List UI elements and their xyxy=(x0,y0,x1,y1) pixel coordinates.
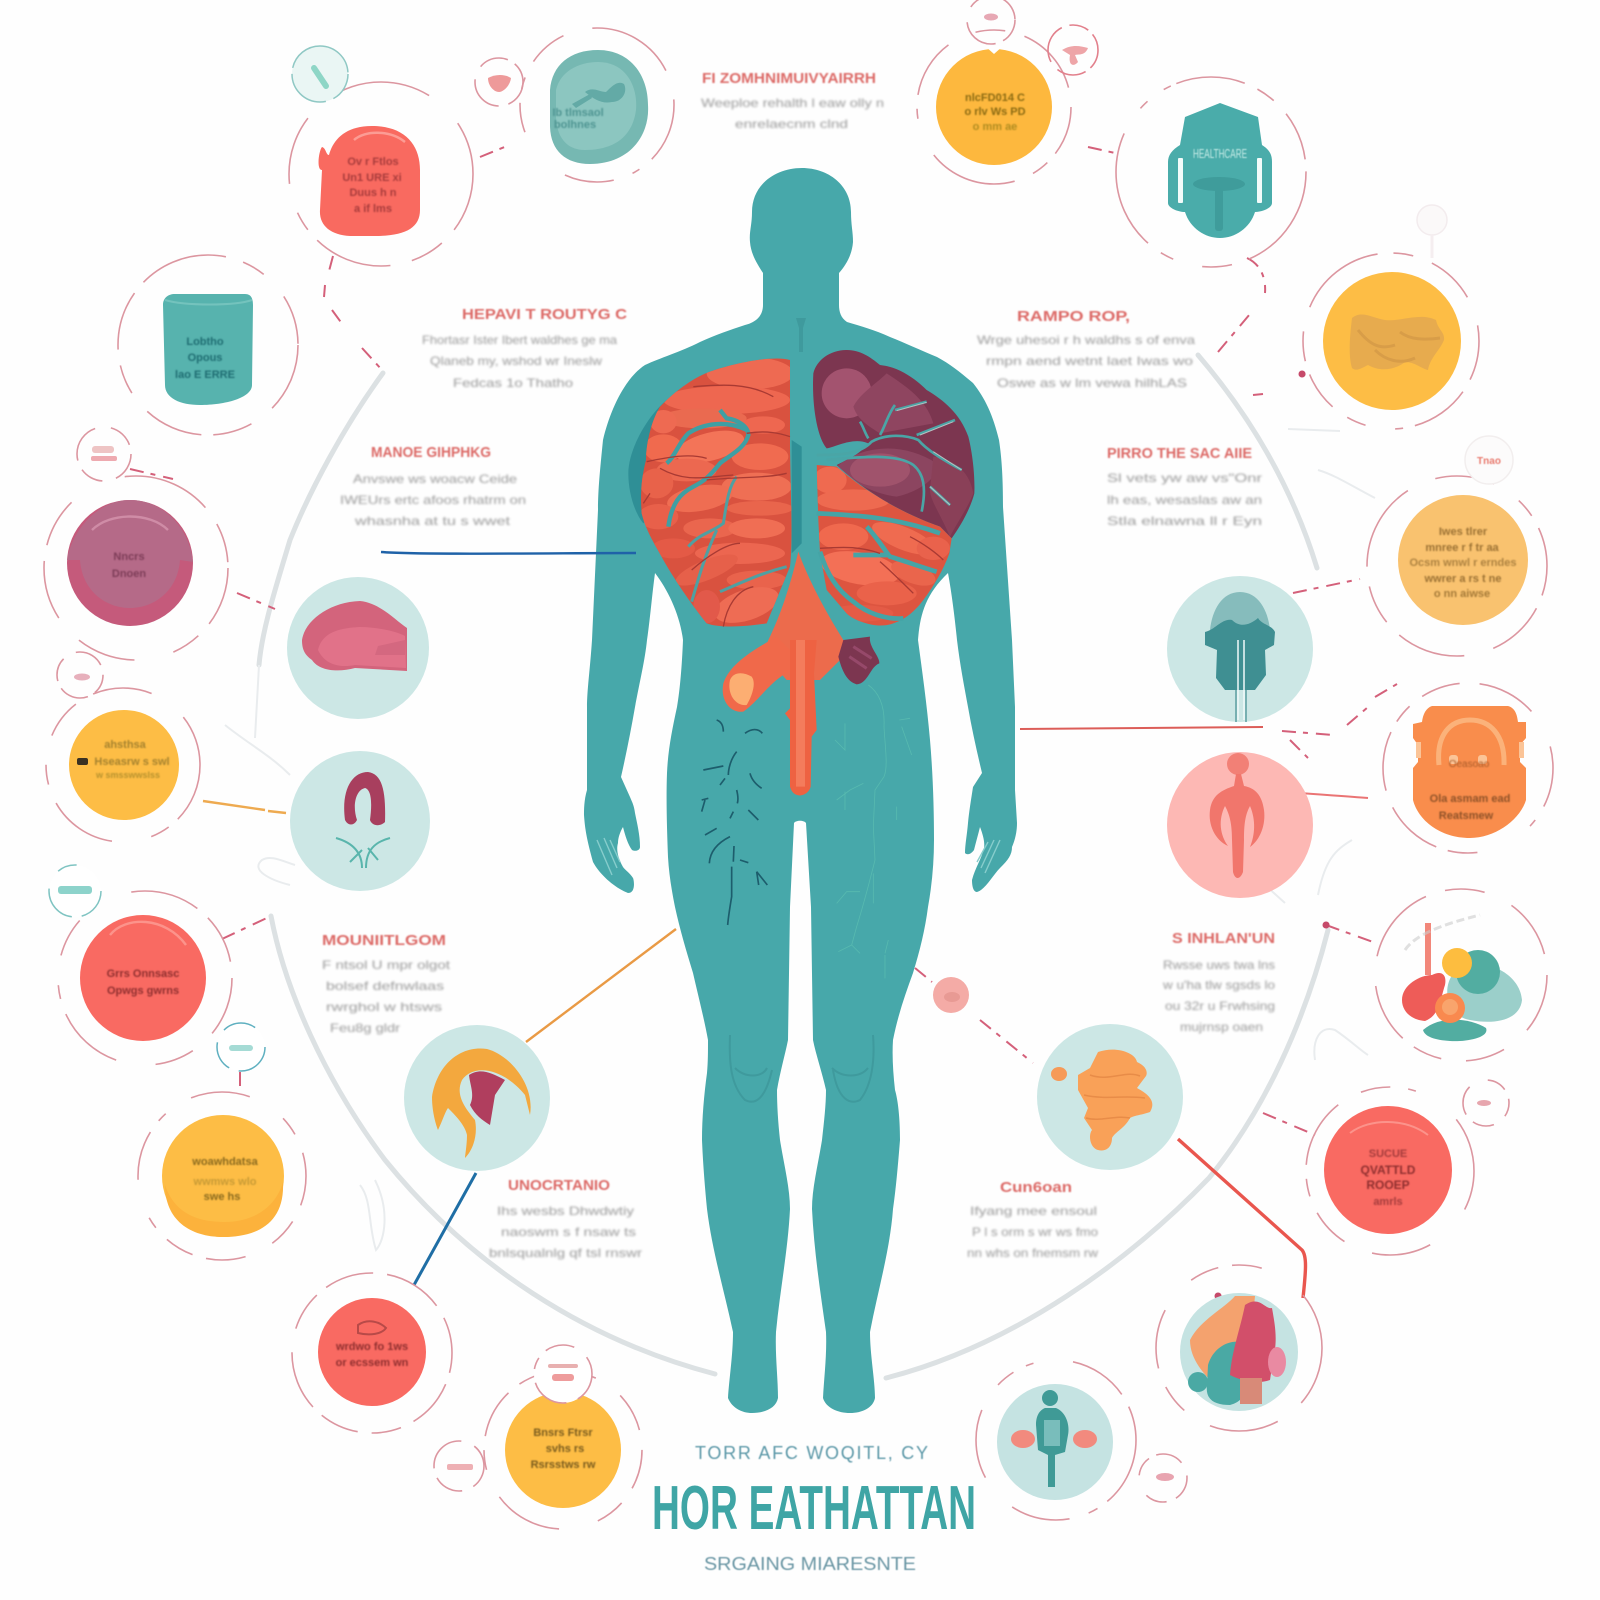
small ring: bottom left xyxy=(434,1441,484,1491)
panel: teal square item: Lobtho xyxy=(186,336,224,348)
organs: lungs and airway, drawn in 3x local coordinates xyxy=(628,347,980,680)
connector: orange to teal circle xyxy=(526,929,676,1042)
dark lobe vessels xyxy=(817,402,962,512)
panel: light orange item: mnree r f tr aa xyxy=(1425,542,1500,554)
central tube xyxy=(785,640,817,795)
panel: teal square item xyxy=(118,255,298,435)
panel: yellow bottom item xyxy=(484,1345,642,1529)
small ring: lower right xyxy=(1139,1454,1187,1502)
pale vessels xyxy=(835,685,912,978)
panel: light orange item: Iwes tlrer xyxy=(1439,526,1488,538)
small ring: top xyxy=(967,0,1015,44)
left lung fissures xyxy=(643,385,790,627)
text block: right second: lh eas, wesaslas aw an xyxy=(1107,493,1262,507)
mask xyxy=(1168,103,1272,238)
text block: bottom right: nn whs on fnemsm rw xyxy=(967,1246,1098,1260)
text block: right second: Sl vets yw aw vs"Onr xyxy=(1107,471,1262,485)
collarbone mark xyxy=(796,318,806,352)
finger lines xyxy=(597,838,1000,875)
panel: red squircle item: Un1 URE xi xyxy=(342,172,402,184)
panel: red right item: ROOEP xyxy=(1366,1178,1410,1192)
text block: right lower: ou 32r u Frwhsing xyxy=(1165,999,1275,1013)
text block: left second: Anvswe ws woacw Ceide xyxy=(353,472,517,486)
right lung fissures xyxy=(820,537,943,593)
text block: left second: whasnha at tu s wwet xyxy=(354,514,511,528)
panel: yellow bottom item: svhs rs xyxy=(546,1443,584,1455)
panel: yellow bottom item: Bnsrs Ftrsr xyxy=(533,1427,593,1439)
panel: teal square item: Opous xyxy=(188,352,222,364)
pink ball xyxy=(933,977,969,1013)
right lung vessels xyxy=(817,513,940,619)
text block: bottom left: UNOCRTANIO xyxy=(508,1177,610,1194)
panel: yellow top item xyxy=(917,30,1071,184)
label: Ov r Ftlos xyxy=(347,156,399,168)
connector: orange to yellow disc xyxy=(203,801,286,813)
title: HOR EATHATTAN xyxy=(652,1474,976,1543)
highlight xyxy=(354,133,405,142)
dark vessels xyxy=(702,720,767,925)
intestines icon xyxy=(1350,315,1444,370)
panel: yellow left item: Hseasrw s swl xyxy=(94,756,170,768)
panel: teal circle with orange organ xyxy=(1037,1024,1183,1170)
text block: top centre: Weeploe rehalth l eaw olly n xyxy=(701,96,884,110)
connector: red line to right side xyxy=(1020,727,1263,729)
text block: right upper: RAMPO ROP, xyxy=(1017,308,1130,325)
text block: left second: IWEUrs ertc afoos rhatrm on xyxy=(340,493,526,507)
panel: teal square item: lao E ERRE xyxy=(175,369,235,381)
text block: right second: Stla elnawna ll r Eyn xyxy=(1107,514,1262,528)
panel: orange badge item: Oeasoao xyxy=(1449,759,1490,770)
right lung, dark lobe xyxy=(813,350,974,538)
text block: right second xyxy=(1107,445,1262,528)
big arc: upper right xyxy=(1198,355,1317,568)
text block: left lower: Feu8g gldr xyxy=(330,1021,400,1035)
panel: red lower disc xyxy=(292,1273,452,1433)
panel: yellow left item xyxy=(46,688,200,842)
text block: bottom left: naoswm s f nsaw ts xyxy=(501,1225,636,1239)
text block: left lower: rwrghol w htsws xyxy=(326,1000,442,1014)
text block: right lower: S INHLAN'UN xyxy=(1172,930,1275,947)
panel: red right item: SUCUE xyxy=(1369,1148,1407,1160)
bent tube xyxy=(723,637,793,712)
small ring: upper left xyxy=(77,427,131,481)
text block: top centre xyxy=(701,70,884,131)
airway fan xyxy=(763,552,847,680)
panel: yellow lower left item: wwmws wlo xyxy=(193,1176,257,1188)
dashed connectors xyxy=(130,146,1397,1135)
text block: right lower: w u'ha tlw sgsds lo xyxy=(1162,978,1275,992)
panel: light orange item xyxy=(1367,476,1547,656)
panel: yellow top item: o mm ae xyxy=(973,121,1017,133)
panel: red lower disc: or ecssem wn xyxy=(336,1357,409,1369)
text block: left lower: F ntsol U mpr olgot xyxy=(322,958,451,972)
panel: red squircle item: Duus h n xyxy=(349,187,397,199)
right lung, red lobes xyxy=(816,465,952,626)
panel: orange badge item: Ola asmam ead xyxy=(1430,793,1510,805)
small pale ring: red tag: Tnao xyxy=(1477,456,1501,467)
body details xyxy=(597,318,1000,1102)
text block: bottom right: Cun6oan xyxy=(1000,1179,1072,1196)
panel: mauve disc item: Dnoen xyxy=(112,568,146,580)
small ring: right pink xyxy=(1463,1080,1509,1126)
connector dots xyxy=(1218,374,1326,1296)
panel: teal circle with orange crescent xyxy=(404,1025,550,1171)
text block: left upper: Fedcas 1o Thatho xyxy=(453,376,573,390)
text block: top centre: enrelaecnm clnd xyxy=(735,117,848,131)
subtitle top: TORR AFC WOQITL, CY xyxy=(695,1443,928,1463)
panel: light orange item: o nn aiwse xyxy=(1434,588,1490,600)
panel: red squircle item: a if lms xyxy=(354,203,392,215)
text block: bottom right: Ifyang mee ensoul xyxy=(970,1204,1097,1218)
panel: teal circle with meat xyxy=(287,577,429,719)
subtitle bottom: SRGAING MIARESNTE xyxy=(704,1554,916,1574)
shape xyxy=(550,50,648,164)
text block: bottom right: P l s orm s wr ws fmo xyxy=(972,1225,1098,1239)
text block: bottom right xyxy=(967,1179,1098,1260)
panel: mauve disc item xyxy=(44,476,228,660)
knee contours xyxy=(730,1035,874,1102)
panel: light orange item: Ocsm wnwl r erndes xyxy=(1410,557,1516,569)
text block: right lower: Rwsse uws twa lns xyxy=(1163,958,1275,972)
ring xyxy=(520,28,674,182)
text block: left upper: Qlaneb my, wshod wr Ineslw xyxy=(430,354,602,368)
connector: blue to lower red disc xyxy=(414,1173,476,1285)
panel: yellow left item: w smsswwslss xyxy=(95,770,160,780)
label: Ib tlmsaol xyxy=(552,107,604,119)
panel: red right item: QVATTLD xyxy=(1361,1163,1416,1177)
small ring: teal bone xyxy=(292,46,348,102)
panel: yellow lower left item xyxy=(138,1092,306,1260)
big arc: lower left xyxy=(271,916,715,1374)
panel: yellow lower left item: swe hs xyxy=(204,1191,240,1203)
left lung xyxy=(637,353,797,633)
panel: teal circle with umbrella icon xyxy=(1167,576,1313,722)
text block: bottom left: Ihs wesbs Dhwdwtiy xyxy=(497,1204,634,1218)
panel: red right item: amrls xyxy=(1373,1196,1403,1208)
panel: red left item: Grrs Onnsasc xyxy=(107,968,179,980)
chest shadow xyxy=(628,400,802,553)
panel: teal mask item xyxy=(1116,77,1306,267)
inner arc xyxy=(1439,720,1504,765)
panel: light orange item: wwrer a rs t ne xyxy=(1423,573,1502,585)
panel: orange badge item xyxy=(1383,683,1553,853)
panel: yellow intestines item xyxy=(1303,253,1479,429)
panel: teal blob item xyxy=(520,28,674,182)
panel: teal mask item: HEALTHCARE xyxy=(1193,146,1247,161)
small pale ring: top right xyxy=(1417,205,1447,258)
text block: right second: PIRRO THE SAC AIIE xyxy=(1107,445,1252,462)
panel: teal blob item: bolhnes xyxy=(554,119,596,131)
text block: right upper: rmpn aend wetnt laet Iwas wo xyxy=(986,354,1193,368)
map glyph xyxy=(572,83,625,108)
left lung teal vessels xyxy=(667,410,748,527)
airway tube and bend, drawn in 3x local coordinates xyxy=(702,637,912,978)
text block: bottom left xyxy=(489,1177,642,1260)
small ring: teal tag xyxy=(49,865,101,917)
text block: left lower: MOUNIITLGOM xyxy=(322,932,446,949)
connector: red from pink disc xyxy=(1257,789,1368,798)
text block: left lower: bolsef defnwlaas xyxy=(326,979,444,993)
panel: red left item: Opwgs gwrns xyxy=(107,985,179,997)
panel: organ cluster item xyxy=(1375,889,1547,1061)
panel: teal circle with body mix xyxy=(1156,1265,1322,1431)
panel: yellow lower left item: woawhdatsa xyxy=(191,1156,259,1168)
panel: teal circle with figure xyxy=(976,1360,1136,1520)
panel: yellow top item: nlcFD014 C xyxy=(965,92,1025,104)
panel: yellow top item: o rlv Ws PD xyxy=(964,106,1026,118)
connector: blue line to lung xyxy=(381,552,636,554)
panel: red left item xyxy=(58,891,232,1065)
text block: right upper xyxy=(977,308,1195,390)
text block: left upper: Fhortasr Ister Ibert waldhes ge ma xyxy=(422,333,617,347)
text block: right upper: Oswe as w lm vewa hilhLAS xyxy=(997,376,1187,390)
text block: right lower xyxy=(1162,930,1275,1034)
panel: yellow bottom item: Rsrsstws rw xyxy=(531,1459,596,1471)
panel: red right item xyxy=(1306,1087,1474,1255)
human body silhouette xyxy=(584,168,1017,1413)
text block: left upper xyxy=(422,306,627,390)
small ring: teal tag lower xyxy=(217,1023,265,1071)
text block: top centre: FI ZOMHNIMUIVYAIRRH xyxy=(702,70,876,87)
big arc: lower right xyxy=(886,930,1328,1378)
panel: mauve disc item: Nncrs xyxy=(113,551,145,563)
shape xyxy=(319,126,420,236)
panel: yellow left item: ahsthsa xyxy=(104,739,147,751)
small ring: bottom top xyxy=(534,1345,592,1403)
panel: red lower disc: wrdwo fo 1ws xyxy=(335,1341,408,1353)
text block: left second: MANOE GIHPHKG xyxy=(371,444,491,461)
small ring: pink heart xyxy=(475,58,523,106)
text block: left upper: HEPAVI T ROUTYG C xyxy=(462,306,627,323)
panel: teal circle with arch xyxy=(290,751,430,891)
text block: bottom left: bnlsqualnlg qf tsl rnswr xyxy=(489,1246,642,1260)
faint pale connector curves xyxy=(225,429,1375,1250)
tube end xyxy=(729,673,754,705)
text block: right upper: Wrge uhesoi r h waldhs s of enva xyxy=(977,333,1195,347)
text block: left lower xyxy=(322,932,451,1035)
big arc: upper left xyxy=(259,373,383,665)
panel: orange badge item: Reatsmew xyxy=(1439,810,1494,822)
small ring: left pink xyxy=(57,652,103,698)
panel: pink circle with figure xyxy=(1167,752,1313,898)
connector: red from teal circle to body-mix ring xyxy=(1178,1139,1306,1298)
small pale ring: red tag xyxy=(1465,436,1513,484)
ring xyxy=(289,82,473,266)
text block: left second xyxy=(340,444,526,528)
small ring: face xyxy=(1048,25,1098,75)
panel: red squircle item xyxy=(289,82,473,266)
text block: right lower: mujrnsp oaen xyxy=(1180,1020,1263,1034)
purple tissue xyxy=(838,637,879,684)
